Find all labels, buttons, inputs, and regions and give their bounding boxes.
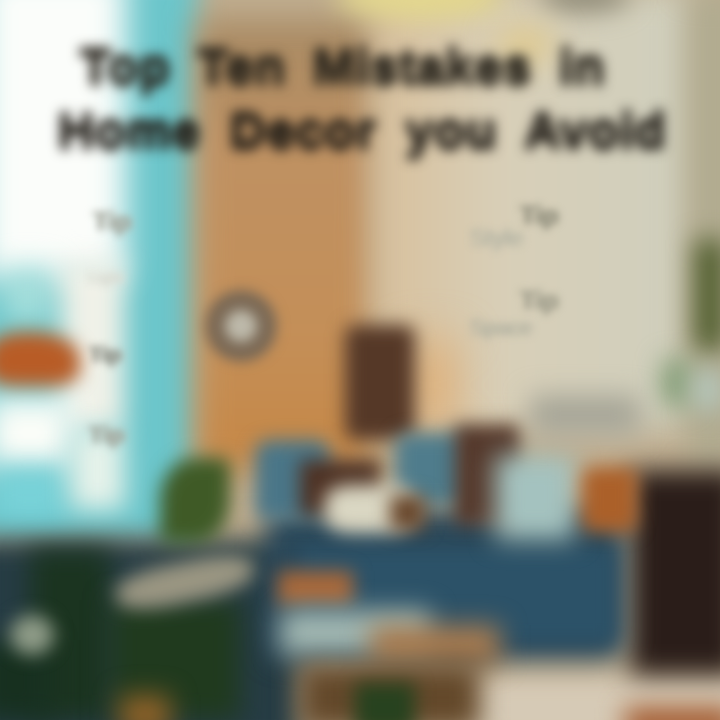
- window labels: Tip: [89, 342, 122, 367]
- warm glow behind chair: [405, 340, 455, 430]
- white cushion: [325, 485, 415, 533]
- wall labels: Style: [470, 225, 523, 252]
- wall clock: [199, 283, 284, 369]
- dark cushion: [300, 460, 380, 515]
- wall labels: Space: [470, 315, 532, 340]
- title: [50, 37, 672, 169]
- upper wall trim: [530, 395, 640, 435]
- blue cushion mid: [395, 433, 470, 505]
- title: Top Ten Mistakes in: [80, 39, 605, 95]
- rug: [465, 675, 720, 720]
- coffee table: [262, 558, 518, 720]
- bottom edge orange: [625, 708, 720, 720]
- window labels: Light: [89, 270, 124, 287]
- bottom plant pot: [120, 695, 170, 720]
- pale cushion: [495, 455, 575, 540]
- wall labels: Tip: [520, 200, 559, 230]
- upper cushions: [242, 382, 650, 558]
- orange callout shape: [0, 332, 80, 386]
- orange cushion: [582, 467, 637, 532]
- title: Home Decor you Avoid: [58, 103, 666, 159]
- blue cushion left: [255, 440, 330, 520]
- brown cushion: [455, 425, 520, 525]
- sofa seat: [300, 548, 615, 643]
- ceiling lamp: [335, 0, 505, 20]
- foreground plant: [0, 444, 264, 720]
- plaster wall panel: [375, 0, 695, 430]
- wall labels: [470, 200, 562, 340]
- tan cushion: [390, 495, 425, 530]
- window labels: [86, 206, 135, 452]
- side console: [630, 470, 720, 675]
- sofa back: [265, 510, 625, 660]
- lamp glow: [495, 25, 555, 65]
- right plant: [647, 224, 720, 419]
- floor and lower band: [0, 540, 300, 720]
- window labels: Tip: [89, 422, 125, 449]
- armchair back: [345, 325, 415, 440]
- wood wall panel: [196, 20, 372, 470]
- window labels: Tip: [93, 206, 132, 236]
- ceiling lamp two: [540, 0, 630, 12]
- right wall edge: [688, 0, 720, 470]
- window panel: [0, 0, 214, 546]
- wall labels: Tip: [520, 285, 559, 315]
